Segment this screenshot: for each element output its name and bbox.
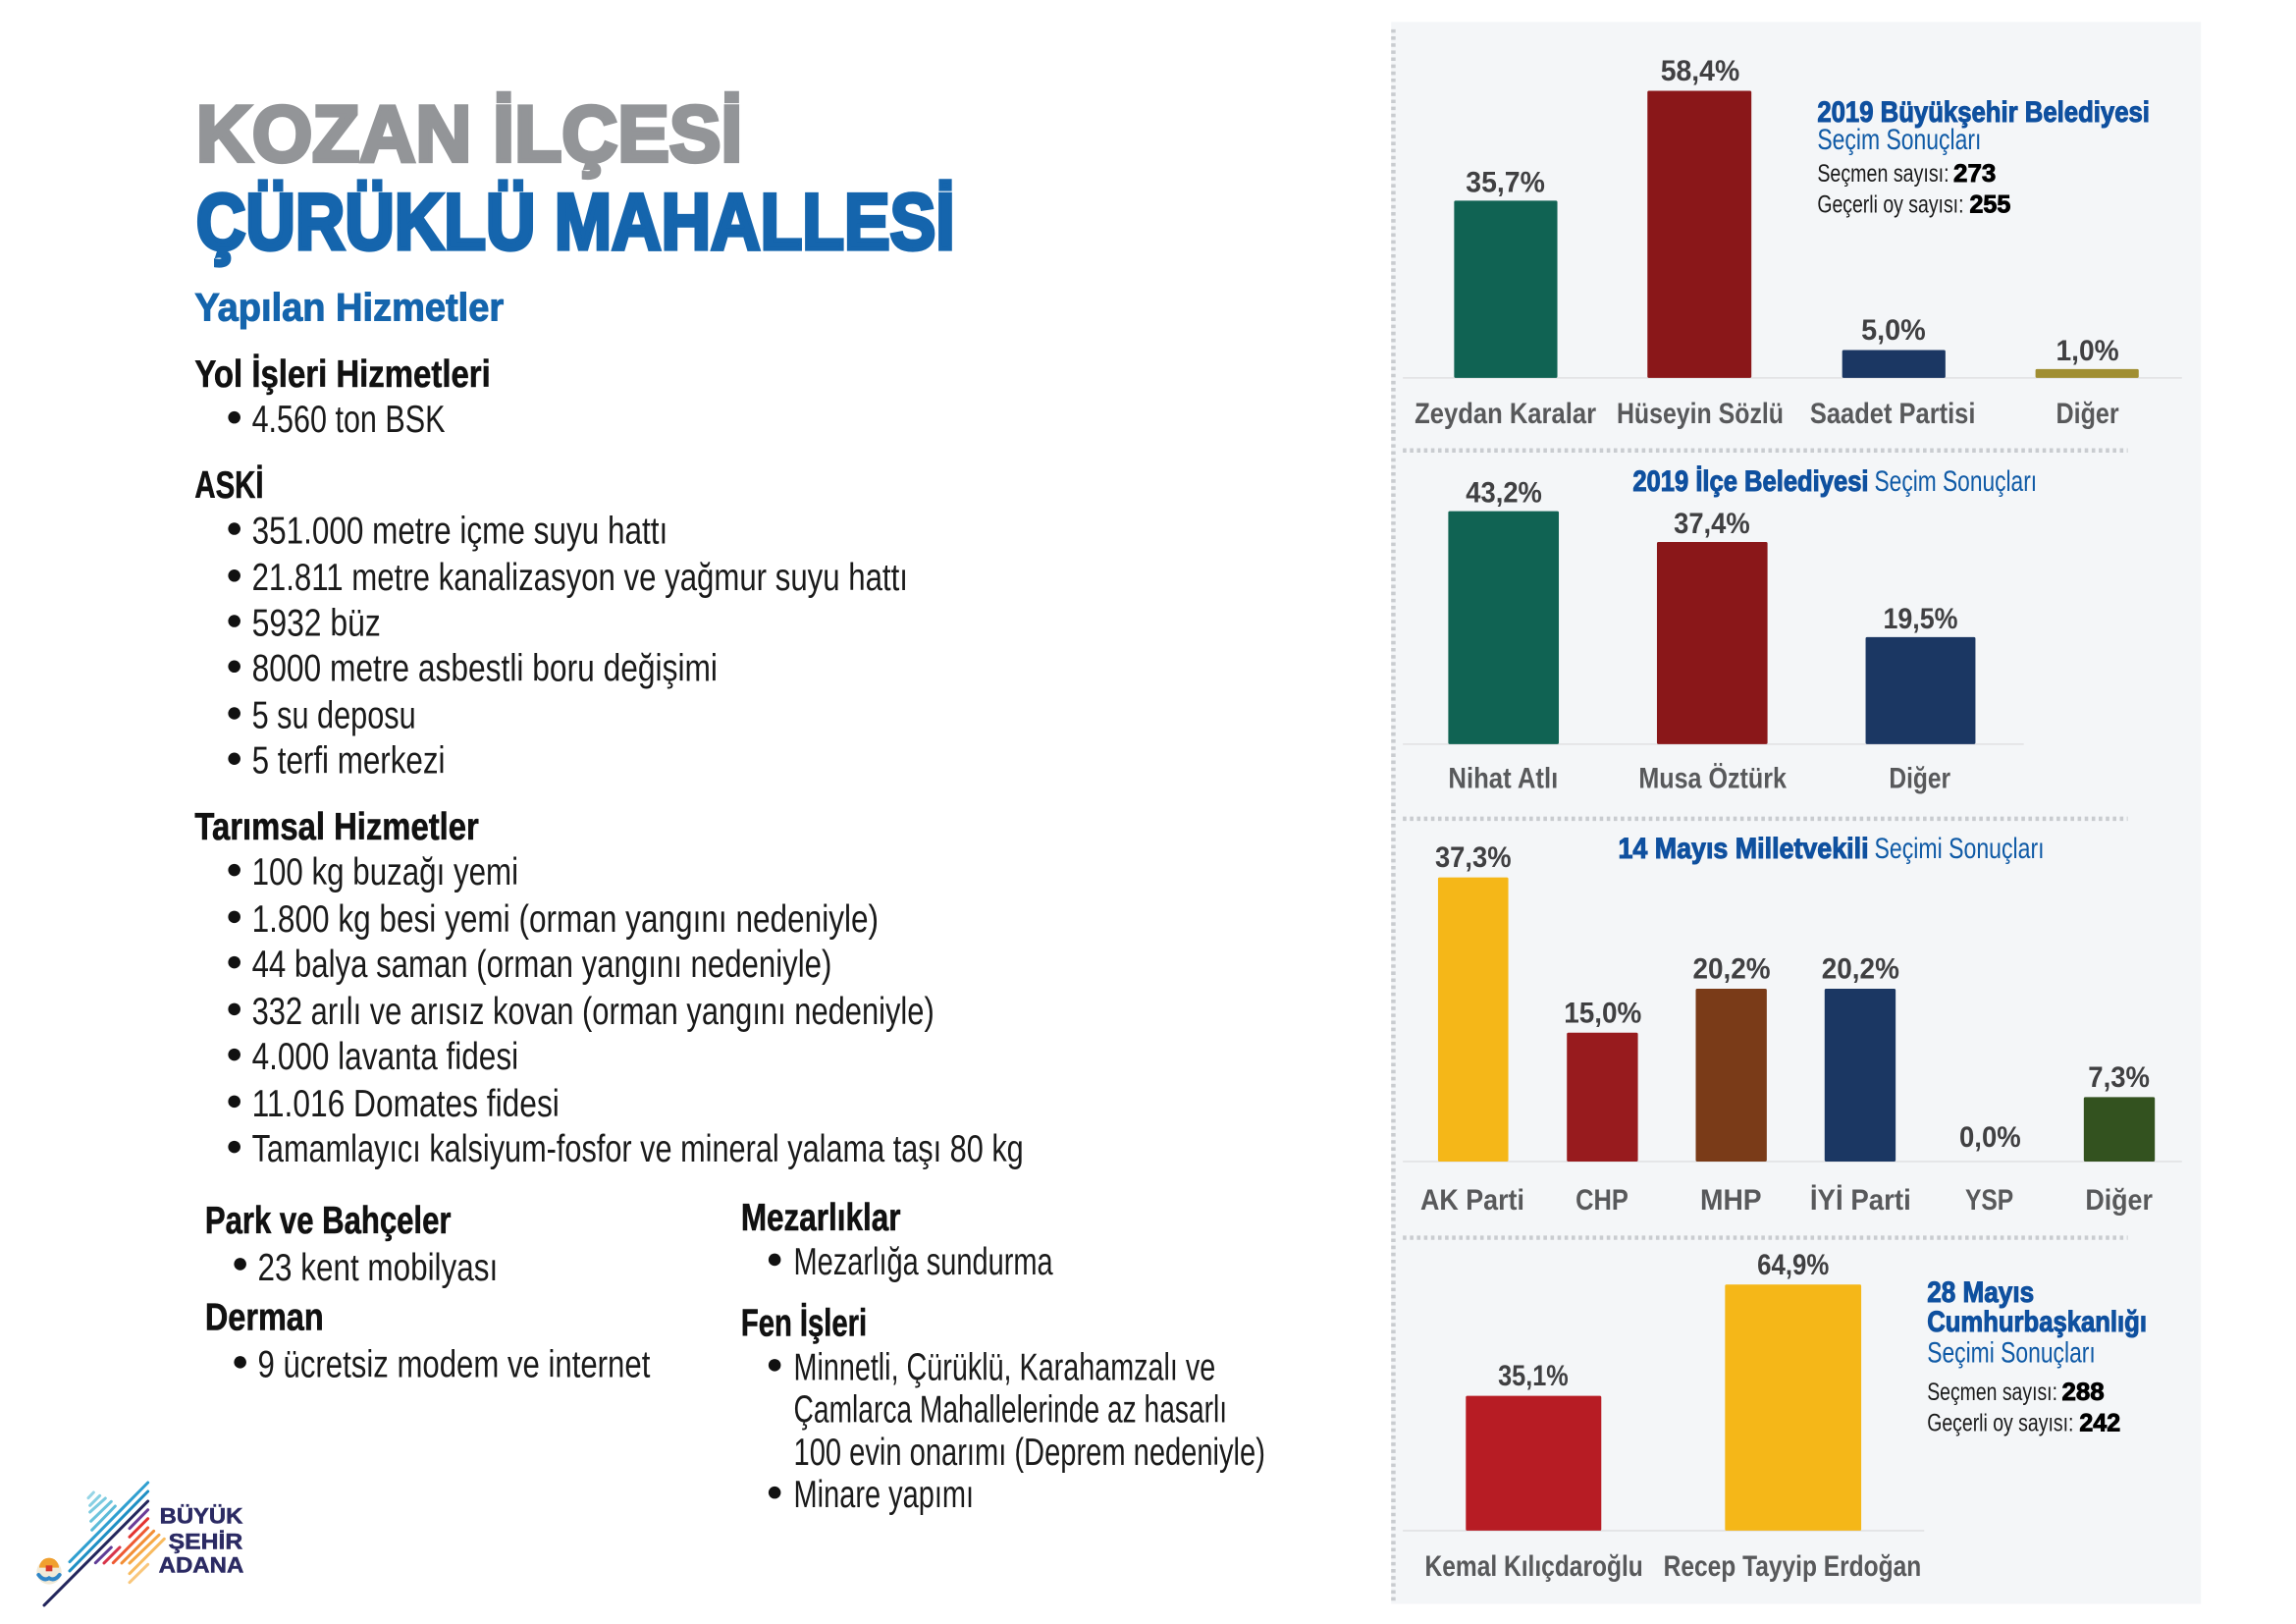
panel: election results [1391,22,2201,1604]
chart: 2019 Büyükşehir Belediyesi: Zeydan Karalar [1415,398,1596,430]
text block: Tarımsal Hizmetler: 11.016 Domates fidesi [252,1083,560,1125]
text block: Fen İşleri [741,1303,1265,1516]
chart: 2019 Büyükşehir Belediyesi: 1,0% [2056,335,2119,367]
chart: 28 Mayıs Cumhurbaşkanlığı: Geçerli oy sayısı: [1927,1409,2073,1436]
heading: Yapılan Hizmetler: Yapılan Hizmetler [194,286,504,330]
chart: 2019 Büyükşehir Belediyesi: 58,4% [1661,55,1739,87]
chart: 2019 İlçe Belediyesi: Musa Öztürk [1638,763,1787,795]
text block: Park ve Bahçeler: 23 kent mobilyası [258,1247,498,1289]
chart: 2019 Büyükşehir Belediyesi: Seçim Sonuçları [1817,124,1981,156]
chart: 14 Mayıs Milletvekili [1403,833,2182,1217]
chart: 14 Mayıs Milletvekili: Seçimi Sonuçları [1875,833,2045,865]
chart: 2019 Büyükşehir Belediyesi [1403,55,2182,430]
chart: 2019 İlçe Belediyesi: Diğer [1889,763,1950,795]
text block: Yol İşleri Hizmetleri: Yol İşleri Hizmetleri [194,353,491,396]
title [196,90,955,267]
chart: 28 Mayıs Cumhurbaşkanlığı: 242 [2079,1409,2120,1436]
chart: 28 Mayıs Cumhurbaşkanlığı: Recep Tayyip Erdoğan [1664,1550,1921,1583]
chart: 28 Mayıs Cumhurbaşkanlığı: 28 Mayıs [1927,1276,2034,1309]
chart: 2019 Büyükşehir Belediyesi: 273 [1953,160,1996,188]
icon: star of stripes [44,1483,164,1605]
chart: 2019 İlçe Belediyesi [1403,465,2037,795]
text block: Tarımsal Hizmetler: 332 arılı ve arısız kovan (orman yangını nedeniyle) [252,991,934,1033]
chart: 14 Mayıs Milletvekili: AK Parti [1420,1184,1524,1217]
text block: Derman [205,1297,651,1385]
text block: Tarımsal Hizmetler: 44 balya saman (orman yangını nedeniyle) [252,944,831,986]
chart: 14 Mayıs Milletvekili: 7,3% [2088,1061,2150,1094]
chart: 28 Mayıs Cumhurbaşkanlığı: Seçmen sayısı: [1927,1379,2057,1406]
text block: ASKİ: 21.811 metre kanalizasyon ve yağmur suyu hattı [252,557,908,599]
chart: 28 Mayıs Cumhurbaşkanlığı: Cumhurbaşkanlığı [1927,1306,2147,1338]
text block: Fen İşleri: Fen İşleri [741,1303,867,1345]
chart: 14 Mayıs Milletvekili: YSP [1965,1184,2013,1217]
chart: 28 Mayıs Cumhurbaşkanlığı [1403,1249,2147,1583]
chart: 2019 Büyükşehir Belediyesi: Seçmen sayısı: [1817,160,1949,188]
title: KOZAN İLÇESİ [196,90,742,179]
text block: ASKİ: 5 terfi merkezi [252,740,446,783]
text block: Park ve Bahçeler: Park ve Bahçeler [205,1200,451,1242]
chart: 2019 İlçe Belediyesi: 43,2% [1466,477,1542,510]
text block: ASKİ: 5 su deposu [252,694,416,736]
chart: 2019 Büyükşehir Belediyesi: Saadet Partisi [1810,398,1975,430]
chart: 28 Mayıs Cumhurbaşkanlığı: 64,9% [1757,1249,1829,1281]
chart: 2019 Büyükşehir Belediyesi: Diğer [2056,398,2119,430]
title: ÇÜRÜKLÜ MAHALLESİ [196,179,955,267]
logo wordmark: BÜYÜK [160,1504,242,1529]
chart: 2019 Büyükşehir Belediyesi: Hüseyin Sözlü [1617,398,1784,430]
text block: Fen İşleri: 100 evin onarımı (Deprem nedeniyle) [794,1432,1265,1474]
text block: ASKİ: ASKİ [194,464,264,507]
chart: 2019 Büyükşehir Belediyesi: 255 [1969,190,2010,218]
chart: 14 Mayıs Milletvekili: 0,0% [1959,1121,2021,1154]
text block: Yol İşleri Hizmetleri: 4.560 ton BSK [252,399,446,441]
chart: 2019 İlçe Belediyesi: Nihat Atlı [1448,763,1558,795]
chart: 2019 Büyükşehir Belediyesi: 2019 Büyükşehir Belediyesi [1817,96,2150,129]
chart: 28 Mayıs Cumhurbaşkanlığı: 288 [2061,1379,2105,1406]
logo wordmark: ADANA [159,1553,243,1578]
text block: ASKİ [194,464,908,783]
chart: 2019 İlçe Belediyesi: 2019 İlçe Belediyesi [1632,465,1869,498]
text block: Derman: 9 ücretsiz modem ve internet [258,1343,651,1385]
text block: Tarımsal Hizmetler: Tamamlayıcı kalsiyum-fosfor ve mineral yalama taşı 80 kg [252,1128,1024,1170]
text block: Tarımsal Hizmetler: 1.800 kg besi yemi (orman yangını nedeniyle) [252,898,879,941]
text block: Park ve Bahçeler [205,1200,498,1289]
chart: 14 Mayıs Milletvekili: 20,2% [1822,953,1899,986]
chart: 14 Mayıs Milletvekili: Diğer [2085,1184,2153,1217]
text block: Mezarlıklar [741,1197,1053,1283]
logo wordmark: ŞEHİR [169,1529,242,1553]
chart: 2019 İlçe Belediyesi: 37,4% [1674,508,1750,540]
chart: 14 Mayıs Milletvekili: 20,2% [1693,953,1771,986]
chart: 14 Mayıs Milletvekili: 14 Mayıs Milletvekili [1618,833,1869,865]
chart: 2019 İlçe Belediyesi: 19,5% [1883,603,1958,635]
text block: ASKİ: 351.000 metre içme suyu hattı [252,510,667,552]
text block: Mezarlıklar: Mezarlığa sundurma [794,1241,1053,1283]
text block: Fen İşleri: Çamlarca Mahallelerinde az hasarlı [794,1389,1227,1432]
chart: 14 Mayıs Milletvekili: CHP [1575,1184,1629,1217]
chart: 2019 Büyükşehir Belediyesi: 35,7% [1466,166,1545,198]
text block: Derman: Derman [205,1297,324,1339]
text block: Tarımsal Hizmetler: 4.000 lavanta fidesi [252,1036,518,1078]
chart: 2019 İlçe Belediyesi: Seçim Sonuçları [1875,465,2037,498]
logo: Büyükşehir Adana [36,1483,243,1605]
chart: 14 Mayıs Milletvekili: 15,0% [1564,997,1641,1029]
logo wordmark [159,1504,243,1578]
chart: 28 Mayıs Cumhurbaşkanlığı: Kemal Kılıçdaroğlu [1425,1550,1643,1583]
chart: 14 Mayıs Milletvekili: 37,3% [1435,841,1512,874]
text block: Fen İşleri: Minare yapımı [794,1474,974,1516]
text block: Yol İşleri Hizmetleri [194,353,491,441]
chart: 28 Mayıs Cumhurbaşkanlığı: Seçimi Sonuçları [1927,1336,2096,1369]
text block: ASKİ: 8000 metre asbestli boru değişimi [252,648,718,690]
text block: ASKİ: 5932 büz [252,602,381,644]
icon: municipal seal [36,1558,62,1585]
text block: Tarımsal Hizmetler [194,806,1024,1170]
chart: 2019 Büyükşehir Belediyesi: Geçerli oy sayısı: [1817,190,1964,218]
text block: Tarımsal Hizmetler: Tarımsal Hizmetler [194,806,479,848]
text block: Fen İşleri: Minnetli, Çürüklü, Karahamzalı ve [794,1346,1215,1388]
chart: 14 Mayıs Milletvekili: İYİ Parti [1810,1184,1911,1217]
chart: 14 Mayıs Milletvekili: MHP [1700,1184,1762,1217]
text block: Mezarlıklar: Mezarlıklar [741,1197,900,1239]
chart: 28 Mayıs Cumhurbaşkanlığı: 35,1% [1498,1360,1569,1392]
text block: Tarımsal Hizmetler: 100 kg buzağı yemi [252,851,518,893]
chart: 2019 Büyükşehir Belediyesi: 5,0% [1861,314,1926,347]
